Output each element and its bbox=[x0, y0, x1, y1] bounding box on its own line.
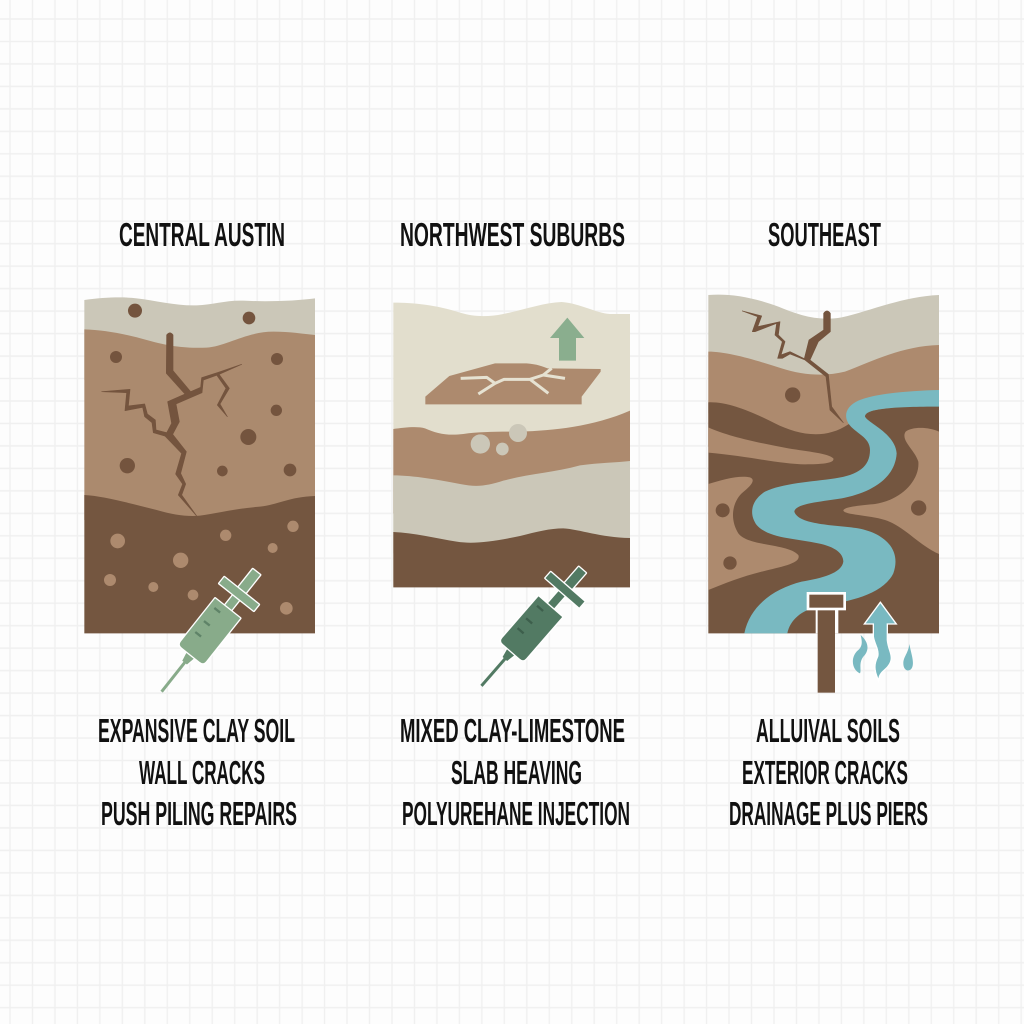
text block: Central Austin details: PUSH PILING REPAIRS bbox=[101, 795, 297, 832]
pale limestone background bbox=[393, 302, 630, 587]
winding river bbox=[744, 390, 939, 633]
text block: Central Austin details: EXPANSIVE CLAY SOIL bbox=[98, 712, 295, 749]
text block: Central Austin details bbox=[98, 712, 297, 832]
text block: Northwest Suburbs details: POLYUREHANE INJECTION bbox=[402, 795, 630, 832]
top pale soil layer bbox=[708, 295, 939, 413]
icon: rising water arrow and droplets bbox=[853, 603, 913, 678]
top pale soil layer bbox=[84, 297, 315, 380]
light soil pebbles bbox=[104, 521, 299, 615]
dark alluvial soil bbox=[708, 402, 939, 633]
dark soil pebbles bbox=[110, 304, 296, 476]
limestone pebbles bbox=[471, 424, 527, 455]
text block: Northwest Suburbs details bbox=[400, 712, 630, 832]
text block: Northwest Suburbs details: SLAB HEAVING bbox=[451, 754, 582, 791]
clay band bbox=[393, 411, 630, 513]
text block: Northwest Suburbs details: MIXED CLAY-LIMESTONE bbox=[400, 712, 625, 749]
bottom dark soil layer bbox=[84, 495, 315, 633]
dark soil pebbles bbox=[716, 387, 926, 570]
icon: light green syringe bbox=[144, 558, 274, 705]
heading: Central Austin: CENTRAL AUSTIN bbox=[119, 216, 285, 253]
panel: Northwest Suburbs soil cross-section bbox=[393, 302, 630, 701]
panel: Central Austin soil cross-section bbox=[84, 297, 315, 705]
text block: Southeast details bbox=[729, 712, 928, 832]
heading: Northwest Suburbs: NORTHWEST SUBURBS bbox=[400, 216, 625, 253]
icon: upward green arrow bbox=[550, 318, 584, 361]
heading: Southeast: SOUTHEAST bbox=[768, 216, 881, 253]
icon: support pier bbox=[808, 593, 845, 693]
icon: dark green syringe bbox=[465, 555, 599, 701]
tan alluvial deposits bbox=[708, 427, 939, 590]
middle clay layer bbox=[84, 329, 315, 520]
exterior cracks bbox=[742, 311, 843, 423]
cracked heaving slab bbox=[425, 363, 601, 404]
wall cracks bbox=[102, 333, 242, 516]
tan soil layer bbox=[708, 345, 939, 447]
panel: Southeast soil cross-section bbox=[708, 295, 939, 693]
text block: Central Austin details: WALL CRACKS bbox=[139, 754, 265, 791]
dark base band bbox=[393, 528, 630, 587]
limestone band bbox=[393, 461, 630, 553]
text block: Southeast details: ALLUIVAL SOILS bbox=[756, 712, 900, 749]
